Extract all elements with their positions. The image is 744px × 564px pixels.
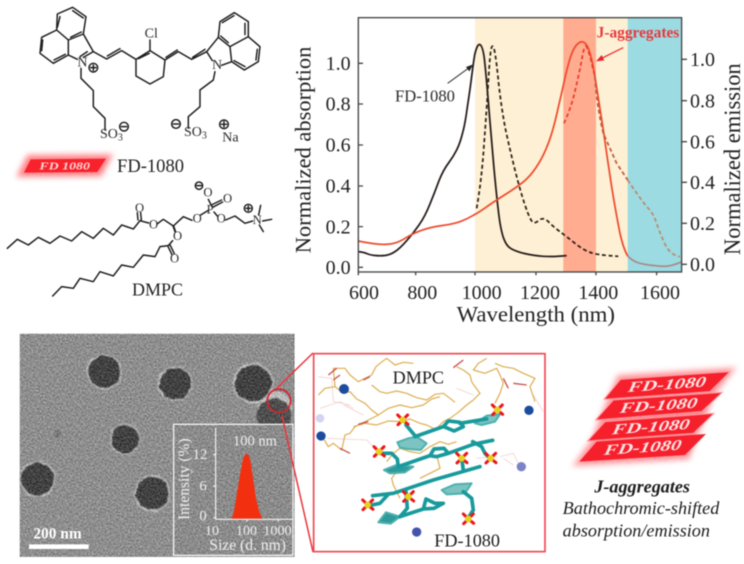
J-aggregates caption: J-aggregates xyxy=(593,477,690,497)
TEM micrograph panel xyxy=(20,334,294,557)
faint lipid head groups xyxy=(318,377,543,467)
absorption curve J-aggregates xyxy=(358,42,682,266)
J-aggregates caption xyxy=(563,477,720,541)
DMPC chemical structure: O xyxy=(149,217,158,231)
DMPC chemical structure: O xyxy=(223,192,232,206)
DMPC chemical structure: O xyxy=(135,201,144,215)
sheet 1: FD-1080 xyxy=(625,375,708,396)
right axis numbers: 1.0 xyxy=(690,49,715,71)
inset size distribution chart: 0 xyxy=(199,509,207,525)
DMPC chemical structure: O xyxy=(217,212,226,226)
FD-1080 red tag icon: FD 1080 xyxy=(38,161,90,172)
FD-1080 annotation with arrow: FD-1080 xyxy=(395,87,455,106)
FD-1080 annotation with arrow xyxy=(395,64,473,106)
FD-1080 chemical structure: 3 xyxy=(118,133,123,144)
x axis numbers: 1000 xyxy=(462,282,502,304)
DMPC chemical structure: O xyxy=(203,186,212,200)
left axis numbers: 0.0 xyxy=(326,257,351,279)
J-aggregate stacked sheets icon xyxy=(575,369,734,465)
molecular dynamics panel xyxy=(314,354,545,552)
inset size distribution chart: 100 nm xyxy=(233,434,278,450)
J-aggregates caption: Bathochromic-shifted xyxy=(563,498,720,518)
right axis numbers: 0.0 xyxy=(690,254,715,276)
x axis numbers: 600 xyxy=(349,282,379,304)
inset size distribution chart: 100 xyxy=(236,524,257,539)
inset size distribution chart: Intensity (%) xyxy=(176,438,193,520)
scale bar xyxy=(29,525,89,549)
inset size distribution chart: 12 xyxy=(193,447,207,463)
DMPC chemical structure: O xyxy=(173,229,182,243)
emission curve J-aggregates dashed xyxy=(564,46,680,257)
sheet 1 xyxy=(604,372,730,399)
zoom connector lines xyxy=(277,353,313,552)
right axis numbers: 0.2 xyxy=(690,213,715,235)
right axis numbers: 0.4 xyxy=(690,172,715,194)
plot frame and ticks xyxy=(358,18,687,275)
sheet 2 xyxy=(596,392,722,420)
left axis title: Normalized absorption xyxy=(291,47,316,253)
x axis numbers: 1400 xyxy=(578,282,618,304)
sheet 3: FD-1080 xyxy=(609,417,692,438)
sheet 3 xyxy=(588,413,714,441)
J-aggregates caption: absorption/emission xyxy=(563,521,710,541)
inset size distribution chart xyxy=(174,424,293,555)
DMPC chemical structure: N xyxy=(253,213,262,227)
zoom circle xyxy=(267,389,291,412)
FD-1080 chemical structure: N xyxy=(212,58,222,73)
phospholipid blue spheres xyxy=(316,384,534,537)
DMPC label in panel: DMPC xyxy=(393,367,444,387)
DMPC lipid chains xyxy=(318,358,535,498)
FD-1080 chemical structure: SO xyxy=(184,125,202,140)
right axis numbers xyxy=(690,49,715,276)
inset size distribution chart: 10 xyxy=(205,524,219,539)
DMPC chemical structure: P xyxy=(207,202,214,216)
inset size distribution chart: Size (d. nm) xyxy=(209,537,286,554)
FD-1080 label in panel: FD-1080 xyxy=(434,531,500,551)
right axis numbers: 0.8 xyxy=(690,90,715,112)
x axis numbers: 800 xyxy=(407,282,437,304)
FD-1080 chemical structure: SO xyxy=(100,127,118,142)
left axis numbers: 1.0 xyxy=(326,53,351,75)
FD-1080 label: FD-1080 xyxy=(117,157,184,177)
spectral shaded bands xyxy=(475,18,682,272)
DMPC chemical structure: O xyxy=(170,252,179,266)
FD-1080 chemical structure: 3 xyxy=(202,131,207,142)
x axis numbers xyxy=(349,282,680,304)
FD-1080 chemical structure: N xyxy=(77,56,87,71)
DMPC label: DMPC xyxy=(132,280,183,300)
DMPC chemical structure: O xyxy=(193,212,202,226)
x axis numbers: 1200 xyxy=(520,282,560,304)
histogram bars xyxy=(232,454,262,519)
left axis numbers xyxy=(326,53,351,279)
right axis numbers: 0.6 xyxy=(690,131,715,153)
sheet 2: FD-1080 xyxy=(617,396,700,417)
left axis numbers: 0.8 xyxy=(326,94,351,116)
FD-1080 chemical structure xyxy=(40,7,260,145)
absorption curve FD-1080 xyxy=(358,45,567,257)
sheet 4 xyxy=(579,434,706,462)
scale bar: 200 nm xyxy=(33,525,82,542)
sulfonate groups xyxy=(363,405,503,524)
inset size distribution chart: 6 xyxy=(199,478,207,494)
stacked FD-1080 molecules xyxy=(368,414,500,524)
TEM image with nanoparticles xyxy=(20,334,294,557)
x axis numbers: 1600 xyxy=(640,282,680,304)
faded end rings xyxy=(378,414,500,524)
left axis numbers: 0.4 xyxy=(326,176,351,198)
J-aggregates annotation with arrow: J-aggregates xyxy=(597,25,679,42)
emission curve FD-1080 dashed xyxy=(477,46,618,256)
J-aggregates annotation with arrow xyxy=(596,25,679,61)
inset size distribution chart: 1000 xyxy=(263,524,292,539)
spectra chart xyxy=(291,18,744,327)
DMPC chemical structure xyxy=(7,182,272,296)
FD-1080 chemical structure: Cl xyxy=(145,27,158,42)
x axis title: Wavelength (nm) xyxy=(457,302,615,327)
FD-1080 red tag icon xyxy=(18,155,111,176)
sheet 4: FD-1080 xyxy=(601,438,684,459)
left axis numbers: 0.2 xyxy=(326,216,351,238)
FD-1080 chemical structure: Na xyxy=(222,130,239,145)
left axis numbers: 0.6 xyxy=(326,135,351,157)
